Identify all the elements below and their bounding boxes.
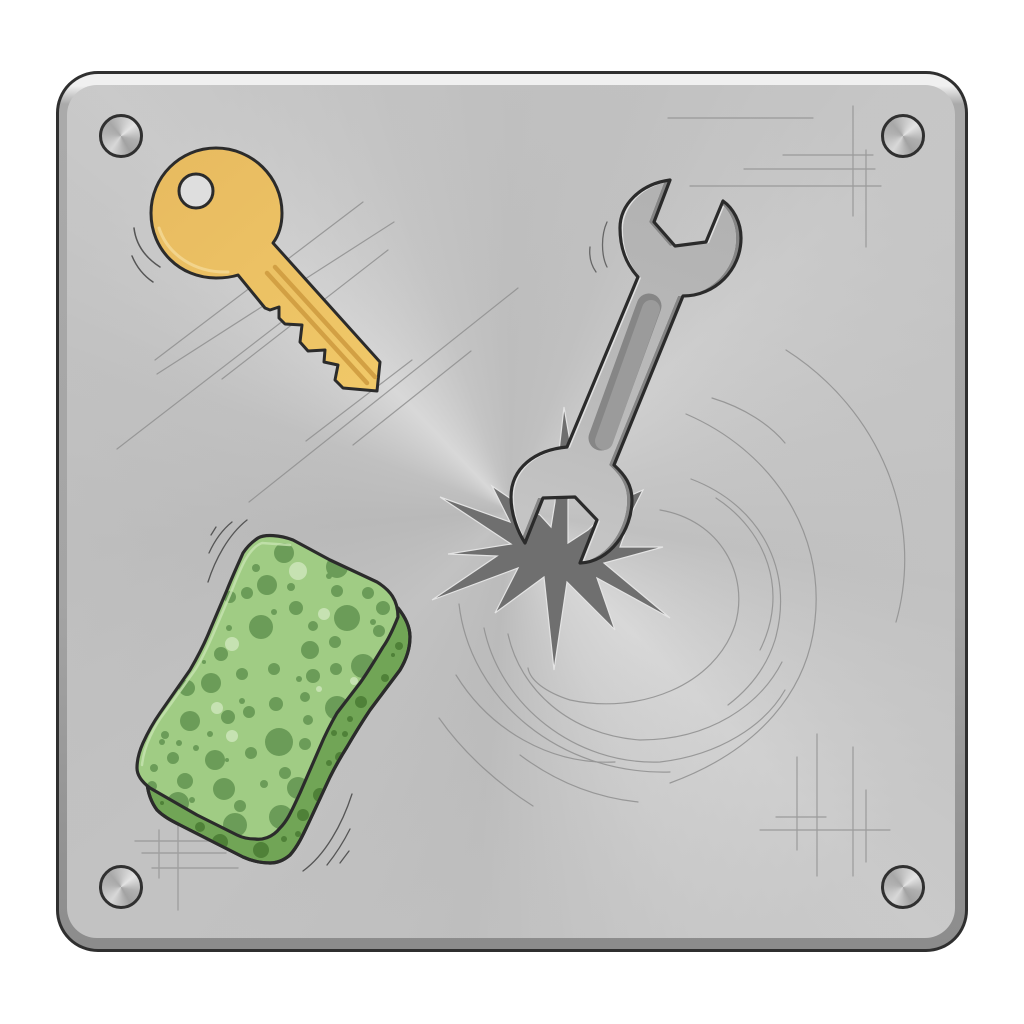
sponge side <box>147 608 410 863</box>
sponge motion lines <box>208 520 352 871</box>
scratches: concentric arcs <box>439 350 905 806</box>
icon: wrench <box>500 170 750 570</box>
plate bevel frame <box>56 71 968 952</box>
corner screw: top left <box>99 114 143 158</box>
plate brushed face <box>67 85 955 938</box>
scratches: bottom right <box>760 734 890 876</box>
scratches: bottom left <box>135 822 238 910</box>
corner screw: top right <box>881 114 925 158</box>
icon: impact star <box>432 407 670 670</box>
scratches: top right <box>668 106 881 247</box>
icon: sponge <box>137 520 410 871</box>
scratches: diagonal near key <box>117 202 518 502</box>
sponge top face <box>137 536 398 839</box>
icon: key <box>132 148 380 391</box>
corner screw: bottom left <box>99 865 143 909</box>
metal plate <box>56 71 968 952</box>
corner screw: bottom right <box>881 865 925 909</box>
